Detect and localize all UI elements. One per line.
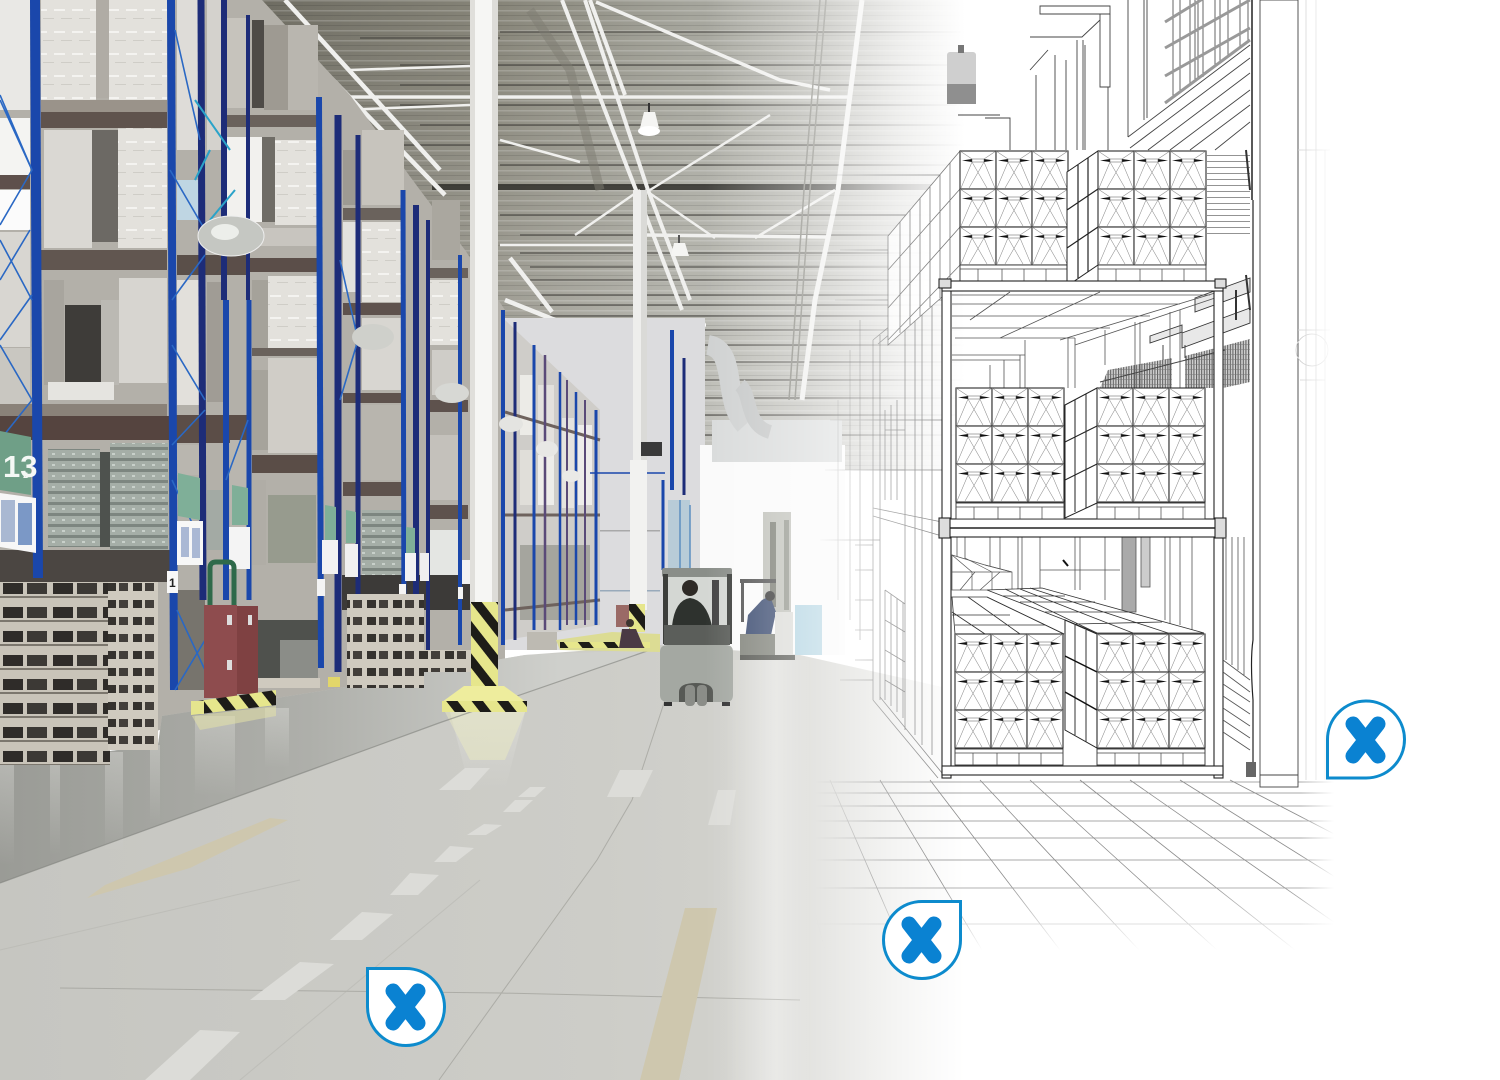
rack backdrop xyxy=(0,0,505,765)
pipes and coil behind middle level xyxy=(1100,278,1250,388)
lower level back wall xyxy=(957,537,1192,630)
distant rack goods xyxy=(505,320,600,640)
floor xyxy=(0,645,1000,1080)
far small pile xyxy=(952,555,1012,590)
air duct xyxy=(708,345,842,462)
photo: real warehouse fading to white xyxy=(0,0,1000,1080)
side faces top-left stack xyxy=(888,151,960,345)
signs on racks xyxy=(0,431,470,599)
forklift rear xyxy=(740,512,822,660)
seated worker xyxy=(619,619,644,648)
shelf underside lines xyxy=(952,292,1215,388)
bay 3 xyxy=(227,18,246,108)
wireframe: digital warehouse drawing xyxy=(800,0,1330,787)
pallet stack: middle left xyxy=(956,388,1064,519)
red safety cabinets with pipes xyxy=(204,562,258,698)
marker: middle xyxy=(884,902,960,978)
faint right details xyxy=(1296,0,1330,780)
sign: aisle 13 large: 13 xyxy=(3,449,37,484)
pallet stacks xyxy=(0,582,557,765)
lower stack tops xyxy=(952,588,1204,634)
monitor and blue lift rack far right xyxy=(641,442,690,570)
marker: left xyxy=(368,968,445,1046)
floor reflections xyxy=(0,708,524,834)
forklift front xyxy=(660,568,733,706)
white right margin xyxy=(1334,0,1500,1080)
sign: aisle 13 large xyxy=(0,431,37,495)
rack frame xyxy=(939,279,1226,778)
pallet stack: lower left xyxy=(955,634,1063,765)
siding below windows xyxy=(1207,152,1250,234)
ceiling lamp cylinder xyxy=(947,45,976,104)
ceiling lamps xyxy=(638,103,706,328)
green signs xyxy=(178,473,415,553)
building pillar xyxy=(1260,0,1298,787)
far wall and end-of-aisle white xyxy=(505,318,845,655)
ceiling trusses xyxy=(255,0,862,400)
windows and diagonal siding xyxy=(1128,0,1250,150)
right edge fade xyxy=(1300,0,1334,960)
sign: aisle 13 large: z xyxy=(23,470,28,481)
racks: shelves and goods xyxy=(0,0,470,690)
bay 4 xyxy=(362,130,404,205)
top wall details xyxy=(958,0,1252,200)
pallet stack: middle right xyxy=(1065,388,1205,519)
rack uprights xyxy=(0,0,684,690)
bay 5 xyxy=(432,200,460,260)
safety mirrors xyxy=(198,216,580,482)
main white column xyxy=(442,0,527,712)
bay far-left xyxy=(0,0,30,110)
ghost structure at left xyxy=(800,175,945,778)
bay 1 xyxy=(41,0,96,100)
marker: right xyxy=(1327,701,1404,778)
rear steps and cable xyxy=(1223,150,1256,777)
hazard wrap xyxy=(471,602,498,686)
wireframe floor tiles xyxy=(826,780,1332,945)
pallet stack: upper right xyxy=(1067,151,1206,286)
small number tags: 1 xyxy=(169,576,176,590)
poster cards xyxy=(0,493,470,584)
yellow hazard curb xyxy=(191,677,340,715)
small number tags xyxy=(167,571,463,599)
bay 2 xyxy=(177,0,199,150)
lower gear band xyxy=(258,620,318,678)
pallet stack: upper left xyxy=(960,151,1068,281)
second column xyxy=(556,190,660,652)
ceiling xyxy=(262,0,951,470)
floor markings xyxy=(87,818,717,1080)
pallet stack: lower right xyxy=(1065,620,1205,765)
